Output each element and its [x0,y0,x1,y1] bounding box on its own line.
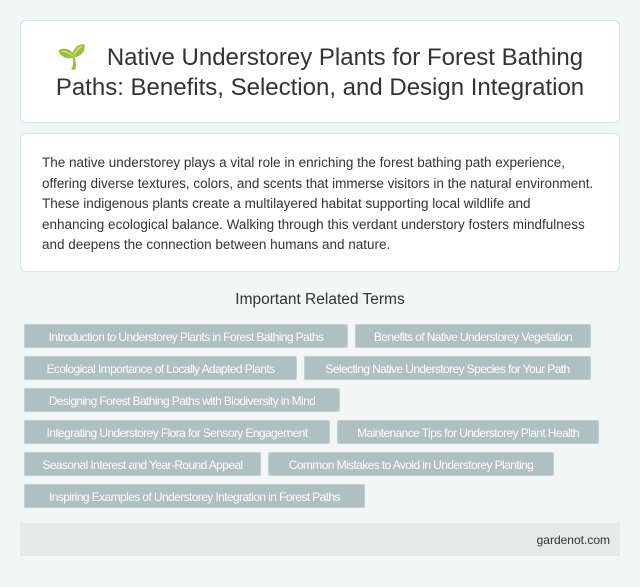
description text: The native understorey plays a vital role in enriching the forest bathing path experience, offering diverse textures, colors, and scents that immerse visitors in the natural environment. These indigenous plants create a multilayered habitat supporting local wildlife and enhancing ecological balance. Walking through this verdant understory fosters mindfulness and deepens the connection between humans and nature. [42,155,593,252]
section heading: Important Related Terms [235,291,405,308]
tags: Benefits of Native Understorey Vegetation [374,330,572,344]
tags: Ecological Importance of Locally Adapted Plants [47,362,274,376]
title: 🌱 Native Understorey Plants for Forest Bathing Paths: Benefits, Selection, and Design Integration [56,44,584,101]
tags: Inspiring Examples of Understorey Integration in Forest Paths [49,490,340,504]
tags: Designing Forest Bathing Paths with Biodiversity in Mind [49,394,315,408]
header card [20,20,620,123]
tags: Selecting Native Understorey Species for Your Path [325,362,570,376]
footer credit: gardenot.com [537,533,610,547]
tags: Seasonal Interest and Year-Round Appeal [42,458,243,472]
description card [20,133,620,272]
tags: Maintenance Tips for Understorey Plant Health [357,426,579,440]
footer [20,523,620,556]
tags: Integrating Understorey Flora for Sensory Engagement [47,426,307,440]
tags: Introduction to Understorey Plants in Forest Bathing Paths [49,330,323,344]
tags: Common Mistakes to Avoid in Understorey Planting [289,458,533,472]
